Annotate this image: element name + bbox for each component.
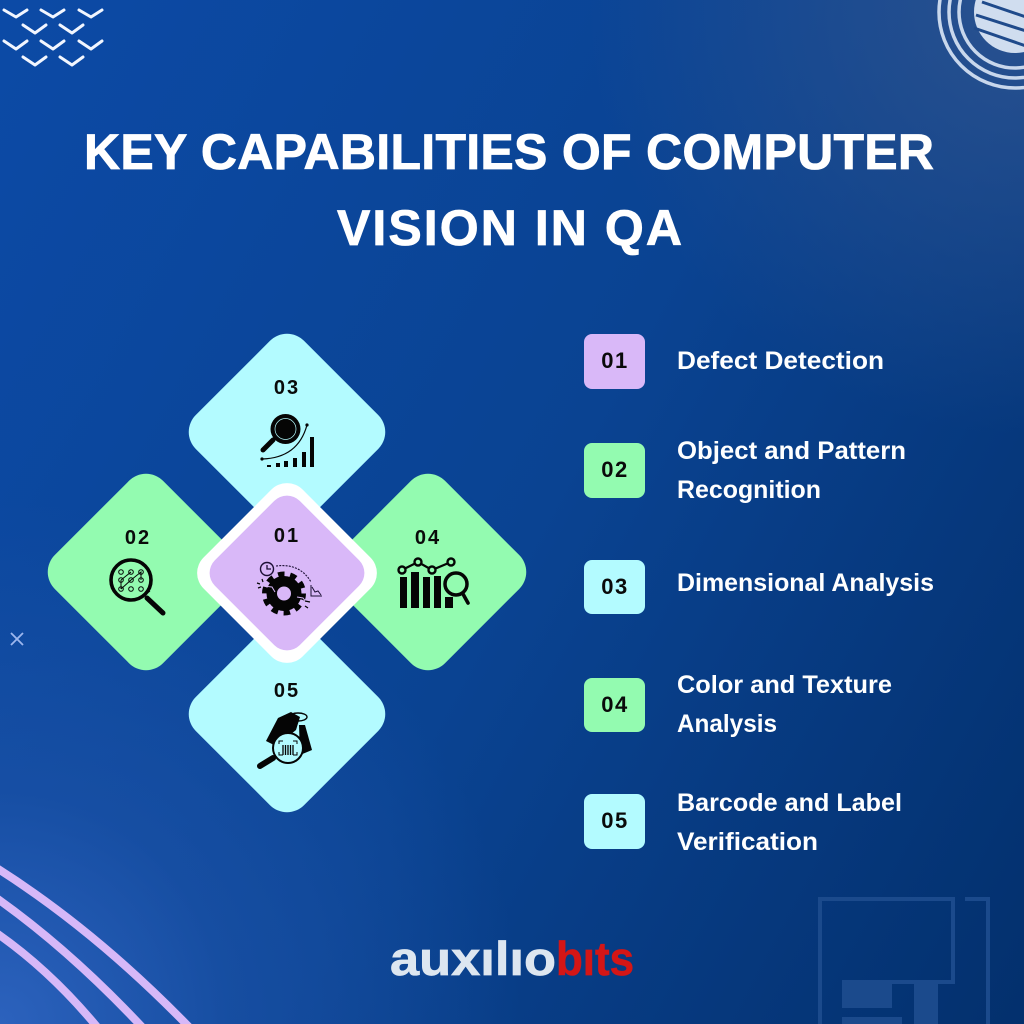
icon: magnifier with growth chart [260, 414, 314, 467]
list item 02: Recognition [677, 476, 821, 504]
list item 01: 01 [601, 348, 629, 373]
list item 02 [584, 437, 906, 504]
decoration: concentric circles top right [939, 0, 1024, 88]
logo: auxılıo [390, 932, 556, 985]
panel: diamond 05: 05 [274, 680, 300, 702]
panel: center diamond 01 [188, 474, 386, 672]
icon: bar chart with magnifier [398, 558, 468, 608]
panel: diamond 04 [320, 464, 536, 680]
list item 03 [584, 560, 934, 614]
list item 04: Color and Texture [677, 671, 892, 699]
icon: pattern magnifier [111, 560, 163, 613]
icon: gear with clock and chart [257, 562, 322, 613]
logo: bıts [556, 932, 634, 985]
decoration: lilac arcs bottom left [0, 867, 190, 1024]
list item 04: 04 [601, 692, 629, 717]
list item 01 [584, 334, 884, 389]
list item 01: Defect Detection [677, 347, 884, 375]
list item 05: Barcode and Label [677, 789, 902, 817]
title: KEY CAPABILITIES OF COMPUTER [84, 124, 934, 180]
panel: diamond 02: 02 [125, 527, 151, 549]
panel: center diamond 01: 01 [274, 525, 300, 547]
decoration: chevrons top left [4, 10, 102, 65]
title [84, 124, 934, 256]
panel: diamond 02 [38, 464, 254, 680]
panel: diamond 03: 03 [274, 377, 300, 399]
list item 05: Verification [677, 828, 818, 856]
logo [390, 932, 634, 985]
title: VISION IN QA [337, 200, 682, 256]
list item 03: Dimensional Analysis [677, 569, 934, 597]
list item 03: 03 [601, 574, 629, 599]
decoration: faint squares bottom right [820, 899, 988, 1024]
panel: diamond 04: 04 [415, 527, 441, 549]
decoration: small cross [11, 633, 23, 645]
list item 04: Analysis [677, 710, 777, 738]
panel: diamond 03 [179, 324, 395, 540]
list item 02: 02 [601, 457, 629, 482]
list item 05: 05 [601, 808, 629, 833]
list item 04 [584, 671, 892, 738]
list item 02: Object and Pattern [677, 437, 906, 465]
icon: barcode tag magnifier [260, 712, 312, 766]
panel: diamond 05 [179, 606, 395, 822]
list item 05 [584, 789, 902, 856]
